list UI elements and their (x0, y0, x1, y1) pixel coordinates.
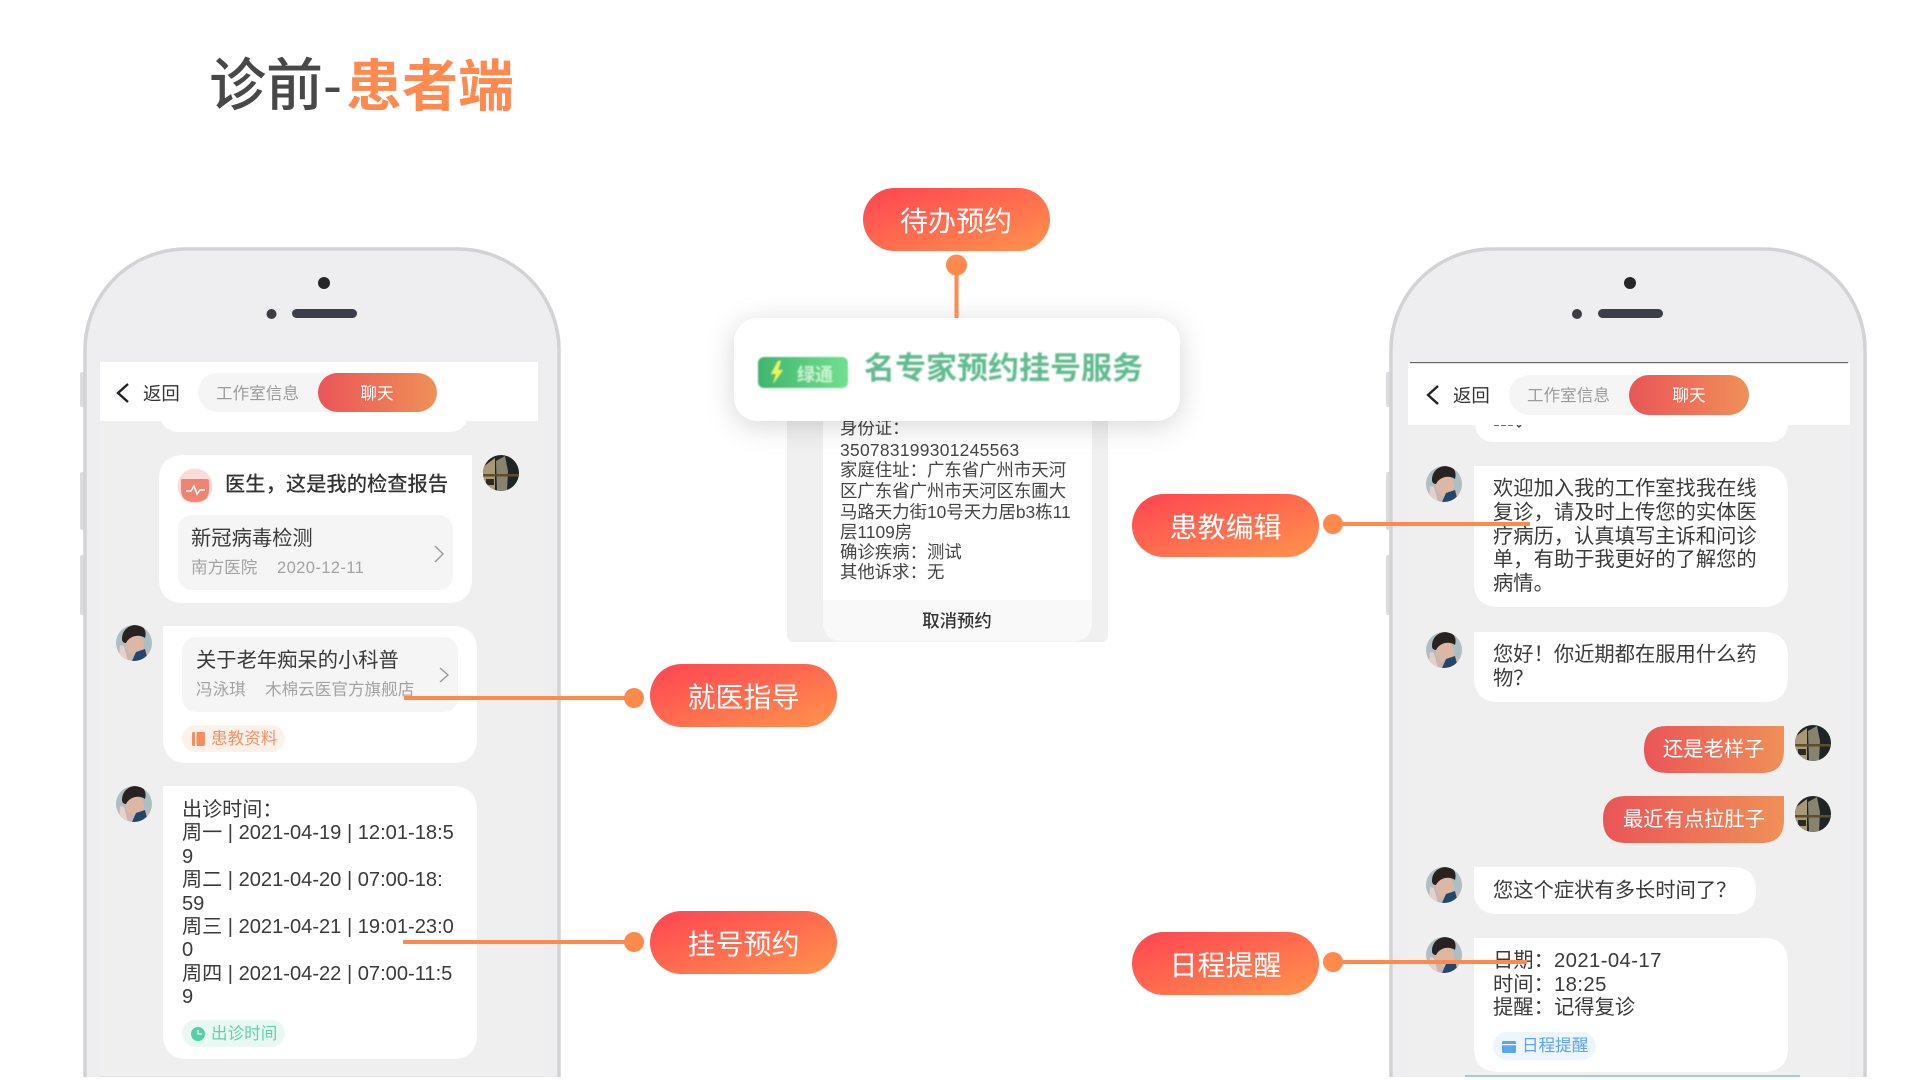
article item (182, 637, 458, 712)
message: patient reply 2: 最近有点拉肚子 (1623, 808, 1765, 831)
message: medication question (1474, 632, 1788, 702)
appointment detail: 身份证： (840, 418, 910, 438)
schedule text: 周四 | 2021-04-22 | 07:00-11:5 (182, 963, 452, 985)
schedule text: 9 (182, 986, 193, 1008)
tag: schedule reminder (1493, 1032, 1596, 1060)
icon: back chevron (1428, 386, 1438, 404)
report item (178, 515, 453, 590)
appointment detail: 马路天力街10号天力居b3栋11 (840, 502, 1071, 522)
message: schedule reminder: 18:25 (1554, 974, 1607, 996)
tab switch: 聊天 (360, 384, 394, 403)
tab switch: 工作室信息 (1527, 386, 1610, 405)
title: 患者端 (346, 55, 514, 118)
schedule text: 周三 | 2021-04-21 | 19:01-23:0 (182, 916, 454, 938)
message: welcome: 疗病历，认真填写主诉和问诊 (1493, 525, 1757, 548)
badge: green channel: 绿通 (797, 365, 833, 385)
tab switch: 工作室信息 (216, 384, 299, 403)
callout: patient education editing: 患教编辑 (1169, 512, 1282, 543)
message: symptom duration (1474, 867, 1756, 914)
message: schedule reminder: 2021-04-17 (1554, 950, 1662, 972)
message: schedule reminder: 时间： (1493, 973, 1554, 996)
tab switch (1509, 375, 1749, 415)
tab switch: 聊天 (1672, 386, 1706, 405)
icon: back chevron (118, 384, 128, 402)
message: check report: 医生，这是我的检查报告 (225, 473, 448, 496)
report item: 南方医院 (191, 558, 258, 577)
message: schedule reminder: 日期： (1493, 950, 1554, 972)
callout: schedule reminder: 日程提醒 (1169, 950, 1282, 981)
previous message remnant (160, 412, 468, 432)
message: welcome: 欢迎加入我的工作室找我在线 (1493, 477, 1757, 500)
message: check report (159, 455, 472, 603)
avatar: patient (483, 455, 519, 491)
schedule text: 59 (182, 893, 204, 915)
callout: schedule reminder (1132, 932, 1527, 995)
message: medication question: 物？ (1493, 667, 1534, 690)
callout: pending appointments: 待办预约 (900, 206, 1012, 237)
message: symptom duration: 您这个症状有多长时间了？ (1493, 879, 1736, 902)
avatar: doctor (116, 625, 152, 661)
previous message remnant (1475, 420, 1788, 442)
schedule text: 周二 | 2021-04-20 | 07:00-18: (182, 869, 443, 891)
message: patient reply 2 (1603, 796, 1784, 843)
schedule text: 9 (182, 846, 193, 868)
message: welcome: 单，有助于我更好的了解您的 (1493, 548, 1757, 571)
appointment detail: 取消预约 (922, 611, 992, 631)
callout: medical guidance (404, 664, 837, 727)
callout: registration (403, 911, 837, 974)
message: welcome: 复诊，请及时上传您的实体医 (1493, 501, 1757, 524)
title (209, 54, 514, 118)
phone body (1386, 249, 1865, 1077)
message: welcome (1474, 466, 1788, 607)
callout: patient education editing (1132, 494, 1530, 557)
avatar: doctor (1426, 867, 1462, 903)
message: clinic hours (163, 786, 477, 1059)
green channel card: 名专家预约挂号服务 (864, 351, 1143, 386)
center: pending appointment card (734, 318, 1180, 642)
app header: 返回 (143, 383, 180, 404)
article item: 冯泳琪 (196, 680, 246, 699)
app header (1408, 362, 1850, 425)
message: patient education (163, 626, 477, 763)
phone: left chat (80, 249, 559, 1077)
tab switch (198, 373, 437, 412)
appointment detail: 350783199301245563 (840, 440, 1020, 460)
callout: pending appointments (863, 188, 1050, 318)
article item: 木棉云医官方旗舰店 (265, 680, 414, 699)
app header: 返回 (1453, 385, 1490, 406)
message: patient reply 1 (1644, 726, 1784, 773)
schedule text: 周一 | 2021-04-19 | 12:01-18:5 (182, 822, 454, 844)
tag: patient education: 患教资料 (211, 729, 278, 748)
appointment detail: 区广东省广州市天河区东圃大 (840, 481, 1066, 501)
avatar: doctor (1426, 466, 1462, 502)
tag: patient education (182, 725, 285, 752)
avatar: patient (1795, 725, 1831, 761)
appointment detail: 确诊疾病：测试 (840, 542, 962, 562)
phone: right chat (1386, 249, 1865, 1077)
appointment detail (787, 400, 1108, 642)
appointment detail: 其他诉求：无 (840, 562, 944, 582)
message: patient reply 1: 还是老样子 (1663, 738, 1764, 761)
message: schedule reminder: 提醒： (1493, 996, 1554, 1019)
tag: clinic hours: 出诊时间 (211, 1024, 277, 1043)
schedule text (182, 798, 454, 1008)
green channel card (734, 318, 1180, 421)
callout: medical guidance: 就医指导 (687, 682, 800, 713)
icon: report (178, 468, 212, 504)
appointment detail: 层1109房 (840, 522, 912, 542)
tag: clinic hours (182, 1020, 285, 1047)
schedule text: 0 (182, 939, 193, 961)
avatar: patient (1795, 796, 1831, 832)
message: schedule reminder (1474, 938, 1788, 1072)
message: schedule reminder: 记得复诊 (1554, 996, 1635, 1019)
article item: 关于老年痴呆的小科普 (196, 649, 399, 672)
message: welcome: 病情。 (1493, 572, 1554, 595)
title: 诊前- (209, 54, 342, 118)
avatar: doctor (116, 786, 152, 822)
avatar: doctor (1426, 632, 1462, 668)
appointment detail: 家庭住址：广东省广州市天河 (840, 460, 1066, 480)
report item: 新冠病毒检测 (191, 527, 313, 550)
badge: green channel (758, 357, 848, 388)
tag: schedule reminder: 日程提醒 (1522, 1036, 1588, 1055)
app header (100, 362, 538, 421)
schedule text: 出诊时间： (182, 798, 282, 821)
message: medication question: 您好！你近期都在服用什么药 (1493, 643, 1757, 666)
phone body (80, 249, 559, 1077)
avatar: doctor (1426, 937, 1462, 973)
callout: registration: 挂号预约 (687, 929, 800, 960)
report item: 2020-12-11 (277, 558, 364, 577)
